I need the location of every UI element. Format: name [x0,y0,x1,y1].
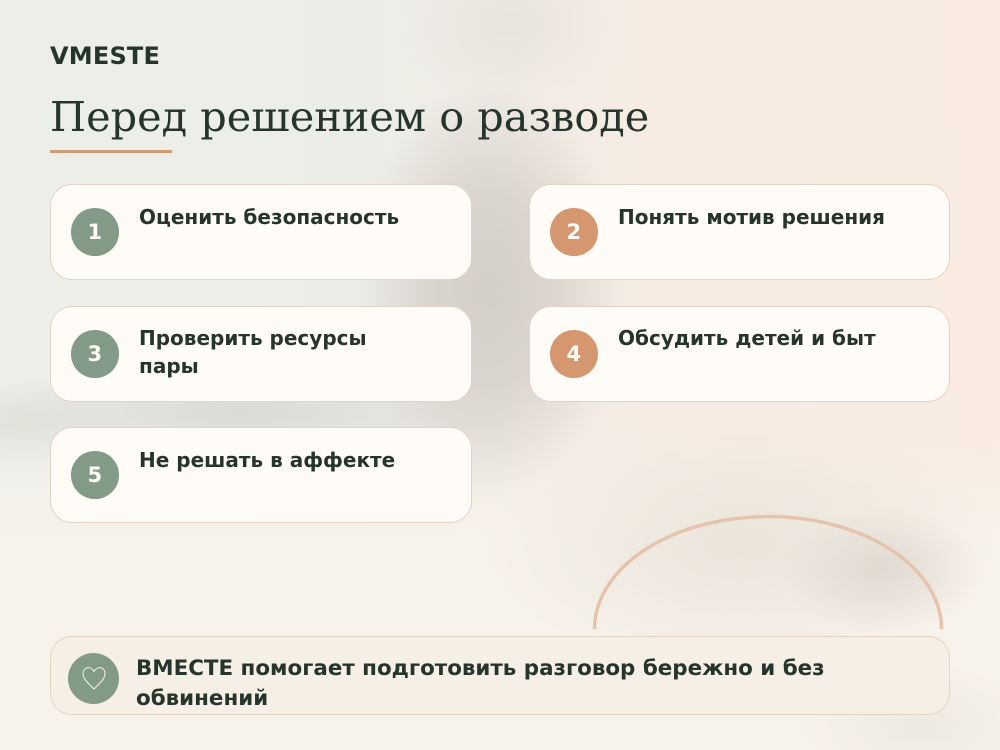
card 2 text: Понять мотив решения [618,205,885,229]
card 3 text [139,326,367,378]
title underline [50,150,172,153]
card 5 [50,427,472,523]
footer banner [50,636,950,715]
card 5 text: Не решать в аффекте [139,448,395,472]
footer text: ВМЕСТЕ помогает подготовить разговор бережно и без обвинений [136,656,825,711]
number 5 [71,451,118,498]
title: Перед решением о разводе [50,93,649,141]
card 1 [50,184,472,280]
number 5: 5 [87,463,102,487]
card 4 text: Обсудить детей и быт [618,326,876,350]
card 1 text: Оценить безопасность [139,205,399,229]
number 3: 3 [87,342,102,366]
number 4 [550,330,598,378]
decorative arch [592,514,944,629]
number 2: 2 [566,220,581,244]
card 4 [529,306,950,402]
card 3 text: пары [139,354,199,378]
brand name: VMESTE [50,42,160,70]
number 1: 1 [87,220,102,244]
card 2 [529,184,950,280]
number 4: 4 [566,342,581,366]
icon: heart [68,653,119,704]
number 1 [71,208,118,256]
card 3 [50,306,472,402]
card 3 text: Проверить ресурсы [139,326,367,350]
number 3 [71,330,118,378]
number 2 [550,208,598,256]
